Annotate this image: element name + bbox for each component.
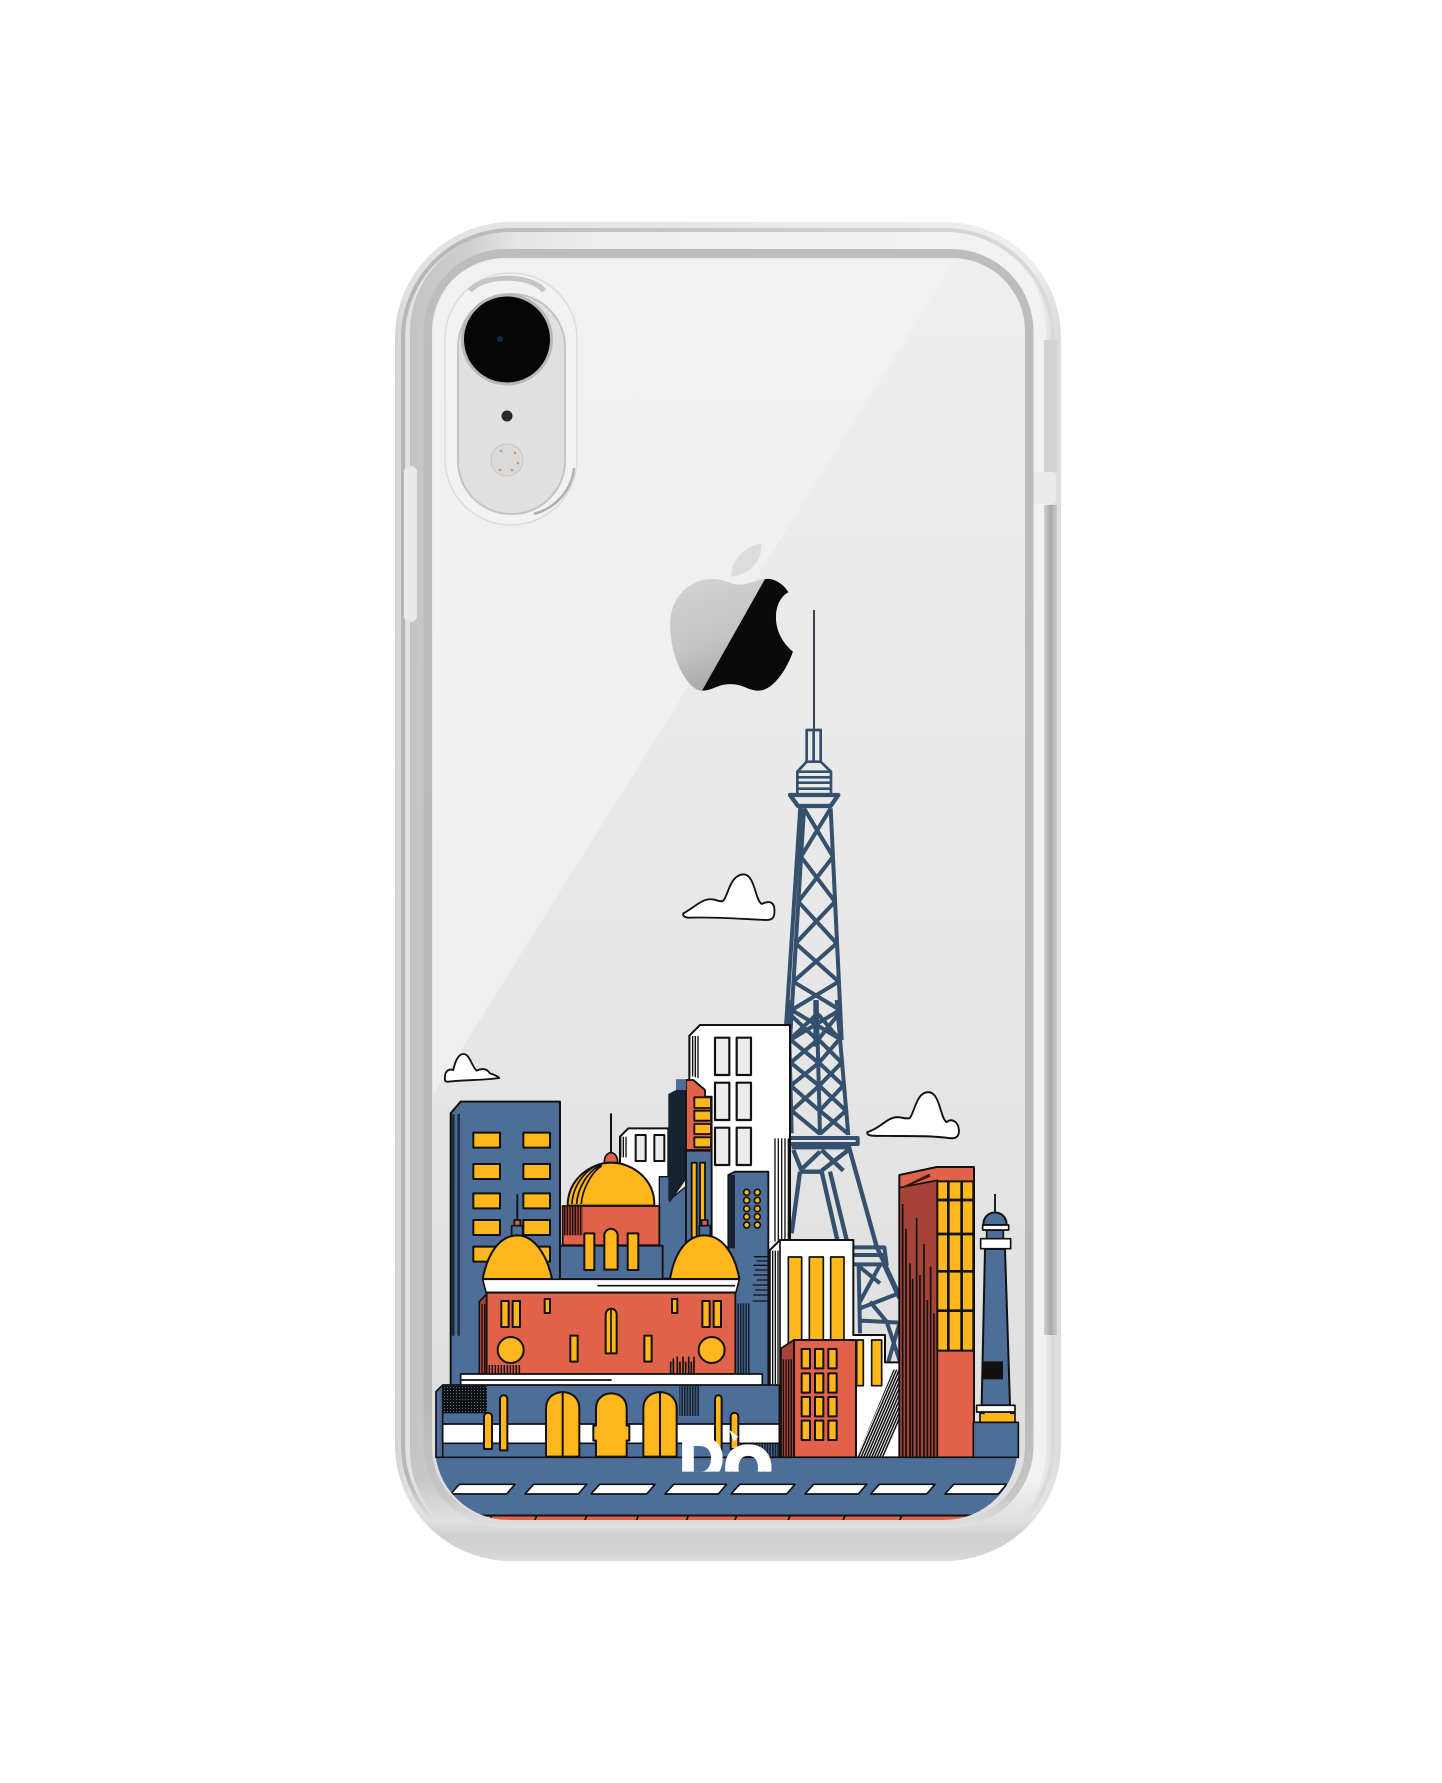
case middle band bbox=[410, 232, 1046, 1550]
tall red tower bbox=[899, 1167, 974, 1457]
flash bbox=[491, 444, 523, 476]
city illustration bbox=[433, 610, 1020, 1522]
reflection on back panel bbox=[433, 260, 955, 1095]
case left highlight bbox=[404, 466, 417, 622]
cornice bbox=[483, 1279, 739, 1292]
curb strip bbox=[481, 1514, 972, 1520]
diagonal hatch bbox=[857, 1370, 922, 1457]
tower base bracing bbox=[859, 1265, 900, 1362]
tower middle lattice bbox=[788, 1000, 848, 1135]
small white building bbox=[620, 1128, 668, 1207]
left building windows bbox=[473, 1133, 550, 1262]
main red building bbox=[479, 1293, 735, 1374]
tall yellow windows bbox=[788, 1257, 882, 1386]
lower right white building bbox=[770, 1240, 922, 1457]
road dashes bbox=[451, 1484, 1007, 1494]
tower top bbox=[786, 730, 842, 1047]
road bbox=[433, 1457, 1020, 1522]
apple logo bbox=[670, 543, 793, 691]
do logo: D bbox=[679, 1425, 724, 1494]
case outer groove bbox=[403, 230, 1053, 1553]
case back panel bbox=[432, 258, 1025, 1520]
side domes bbox=[483, 1194, 739, 1279]
white building windows bbox=[715, 1038, 751, 1165]
lower base building bbox=[436, 1385, 779, 1457]
do logo: O bbox=[725, 1435, 772, 1502]
case right upper bar bbox=[1044, 340, 1057, 472]
camera lens bbox=[462, 295, 552, 384]
eiffel tower bbox=[786, 610, 908, 1362]
case bottom rim bbox=[410, 1489, 1041, 1561]
cloud: left bbox=[445, 1054, 499, 1082]
lighthouse bbox=[973, 1194, 1018, 1457]
blue left building bbox=[451, 1102, 560, 1387]
phone case bbox=[395, 222, 1061, 1561]
microphone dot bbox=[502, 410, 512, 422]
red building windows bbox=[501, 1299, 721, 1362]
white tall building bbox=[689, 1025, 790, 1260]
narrow windows bbox=[484, 1395, 738, 1450]
antenna bbox=[811, 610, 816, 730]
arched doors bbox=[546, 1392, 677, 1457]
case right button highlight bbox=[1032, 472, 1056, 504]
case outer shell bbox=[395, 222, 1061, 1561]
do logo bbox=[682, 1430, 772, 1472]
cloud: middle bbox=[683, 874, 774, 920]
small red building windows bbox=[802, 1349, 837, 1440]
camera housing bbox=[445, 273, 577, 525]
round windows bbox=[498, 1337, 524, 1363]
tower lower platform bbox=[853, 1247, 887, 1264]
tower lower legs bbox=[792, 1145, 908, 1353]
blue right building bbox=[728, 1172, 768, 1457]
cloud: right bbox=[867, 1092, 959, 1138]
case right lower bar bbox=[1044, 505, 1057, 1335]
central red and blue tower bbox=[659, 1079, 712, 1278]
dot windows bbox=[744, 1189, 760, 1228]
terrace bbox=[461, 1374, 762, 1385]
tower first platform bbox=[790, 1138, 858, 1147]
case inner edge bbox=[428, 254, 1029, 1524]
central dome bbox=[560, 1113, 663, 1279]
case right highlight strip bbox=[1032, 335, 1043, 1395]
small red building bbox=[781, 1340, 856, 1457]
